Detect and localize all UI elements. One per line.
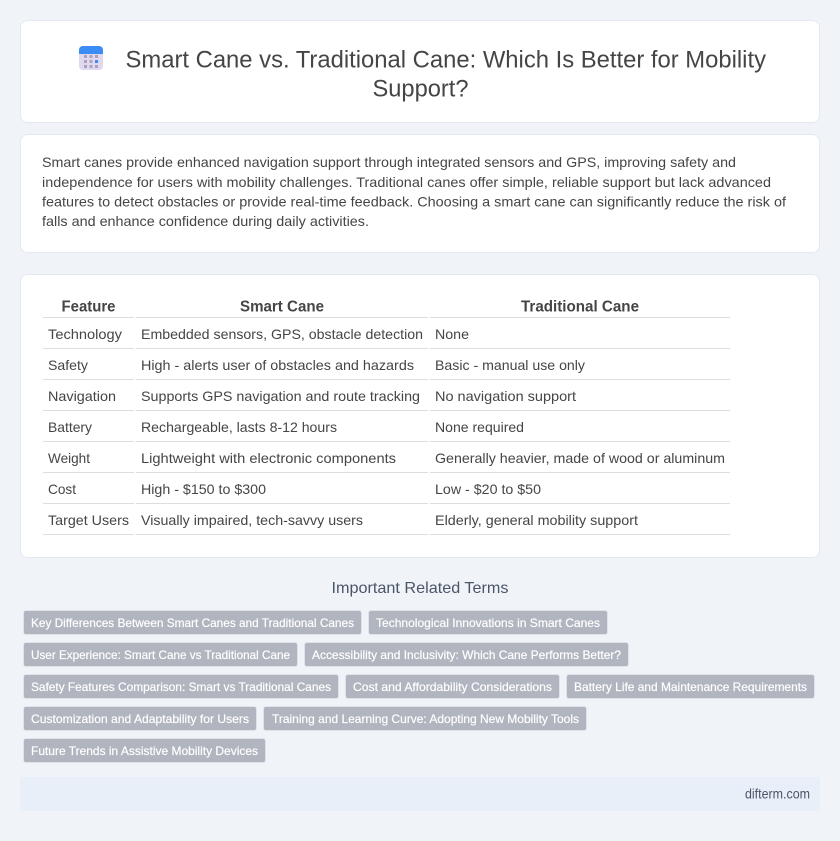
tag — [24, 674, 338, 698]
footer brand: difterm.com — [745, 786, 810, 802]
row: safety: High - alerts user of obstacles and hazards — [141, 357, 414, 373]
tag — [24, 738, 266, 762]
title: Smart Cane vs. Traditional Cane: Which Is Better for Mobility — [126, 46, 766, 74]
row: safety: Safety — [48, 357, 88, 373]
tag — [368, 610, 608, 634]
row: weight: Weight — [48, 450, 90, 466]
table header: Traditional Cane — [521, 298, 639, 316]
tag — [566, 674, 814, 698]
title: Support? — [372, 76, 468, 102]
panel: summary text — [20, 134, 820, 252]
tag — [24, 610, 362, 634]
row: navigation — [48, 388, 576, 404]
tag — [346, 674, 560, 698]
icon: calendar — [79, 46, 103, 70]
tag: Training and Learning Curve: Adopting New Mobility Tools — [272, 712, 579, 726]
row: target users: Target Users — [48, 512, 129, 528]
row: battery — [48, 419, 524, 435]
row: cost: Cost — [48, 481, 76, 497]
tag — [24, 642, 298, 666]
row: weight: Generally heavier, made of wood or aluminum — [435, 450, 725, 466]
row: battery: Battery — [48, 419, 92, 435]
summary paragraph: features to detect obstacles or provide real-time feedback. Choosing a smart cane can significantly reduce the risk of — [42, 194, 786, 210]
row: target users: Elderly, general mobility support — [435, 512, 638, 528]
row: target users — [48, 512, 638, 528]
table header: Feature — [62, 298, 116, 316]
summary paragraph: Smart canes provide enhanced navigation support through integrated sensors and GPS, improving safety and — [42, 154, 736, 170]
summary paragraph: falls and enhance confidence during daily activities. — [42, 213, 369, 229]
tag — [24, 706, 256, 730]
tag — [264, 706, 586, 730]
tag: Key Differences Between Smart Canes and Traditional Canes — [31, 616, 354, 630]
row: technology: Technology — [48, 326, 122, 342]
footer — [20, 777, 820, 811]
heading: related terms: Important Related Terms — [332, 580, 508, 597]
tag: Future Trends in Assistive Mobility Devices — [31, 744, 258, 758]
tag: Cost and Affordability Considerations — [353, 680, 552, 694]
row: cost — [48, 481, 541, 497]
row: weight — [48, 450, 725, 466]
row: weight: Lightweight with electronic components — [141, 450, 396, 466]
row: safety: Basic - manual use only — [435, 357, 585, 373]
tag: Technological Innovations in Smart Canes — [376, 616, 600, 630]
row: battery: Rechargeable, lasts 8-12 hours — [141, 419, 337, 435]
title — [126, 46, 766, 102]
row: target users: Visually impaired, tech-savvy users — [141, 512, 363, 528]
row: technology: Embedded sensors, GPS, obstacle detection — [141, 326, 423, 342]
tag: User Experience: Smart Cane vs Traditional Cane — [31, 648, 290, 662]
row: cost: Low - $20 to $50 — [435, 481, 541, 497]
panel: comparison table — [20, 274, 820, 558]
table header — [62, 298, 639, 316]
tag: Customization and Adaptability for Users — [31, 712, 249, 726]
row: battery: None required — [435, 419, 524, 435]
row: navigation: Supports GPS navigation and route tracking — [141, 388, 420, 404]
table header: Smart Cane — [240, 298, 324, 316]
tag — [304, 642, 628, 666]
row: technology: None — [435, 326, 469, 342]
panel: header — [20, 20, 820, 122]
table rules — [43, 318, 730, 534]
tag: Safety Features Comparison: Smart vs Traditional Canes — [31, 680, 331, 694]
row: cost: High - $150 to $300 — [141, 481, 266, 497]
row: technology — [48, 326, 469, 342]
row: navigation: Navigation — [48, 388, 116, 404]
row: navigation: No navigation support — [435, 388, 576, 404]
related term tags — [24, 610, 814, 762]
tag: Battery Life and Maintenance Requirements — [574, 680, 807, 694]
summary paragraph: independence for users with mobility challenges. Traditional canes offer simple, reliable support but lack advanced — [42, 174, 771, 190]
row: safety — [48, 357, 585, 373]
summary paragraph — [42, 154, 786, 229]
tag: Accessibility and Inclusivity: Which Cane Performs Better? — [312, 648, 621, 662]
